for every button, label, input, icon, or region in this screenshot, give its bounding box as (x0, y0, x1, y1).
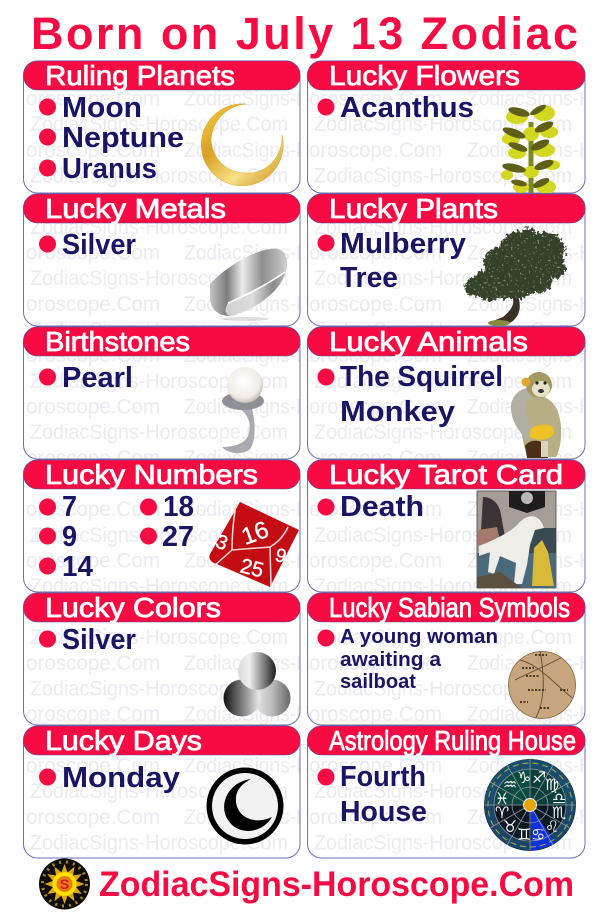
footer: logo: S (60, 876, 69, 892)
list: planets (39, 92, 184, 185)
icon: silver spheres (224, 652, 290, 716)
heading: lucky colors: Lucky Colors (45, 592, 221, 623)
icon: zodiac wheel: ♐ (532, 770, 546, 787)
background watermark: ZodiacSigns-Horoscope.Com (314, 780, 572, 803)
list: birthstones: Pearl (62, 362, 133, 394)
icon: red polyhedral die: 16 (238, 516, 272, 551)
list: sabian symbol: awaiting a (340, 649, 442, 671)
background watermark: ZodiacSigns-Horoscope.Com (314, 216, 572, 239)
panel: astrology ruling house (308, 725, 585, 858)
list: house (318, 761, 427, 828)
panel: lucky tarot card (308, 459, 585, 592)
list: tarot: Death (340, 491, 424, 523)
background watermark: ZodiacSigns-Horoscope.Com (30, 780, 288, 803)
background watermark: ZodiacSigns-H (467, 344, 593, 367)
icon: monday moon symbol (206, 768, 284, 844)
background watermark: ZodiacSigns-H (184, 652, 310, 675)
background watermark: oroscope.Com (309, 396, 442, 418)
panel: lucky numbers (24, 459, 300, 592)
background watermark: ZodiacSigns-H (467, 396, 593, 418)
background watermark: oroscope.Com (309, 550, 442, 572)
heading: lucky sabian symbols: Lucky Sabian Symbols (329, 592, 570, 623)
icon: zodiac wheel: ♑ (517, 770, 531, 787)
icon: acanthus flower (501, 103, 560, 194)
icon: zodiac wheel: ♎ (552, 791, 566, 808)
background watermark: ZodiacSigns-Horoscope.Com (314, 421, 572, 444)
list: animals: Monkey (340, 396, 455, 428)
background watermark: oroscope.Com (26, 447, 160, 470)
heading: birthstones: Birthstones (45, 326, 190, 357)
background watermark: oroscope.Com (309, 139, 442, 162)
panel: lucky metals (24, 193, 300, 326)
background watermark: oroscope.Com (26, 396, 160, 418)
icon: zodiac wheel (484, 759, 576, 851)
list: days: Monday (62, 762, 180, 794)
background watermark: oroscope.Com (26, 139, 160, 162)
heading: ruling planets: Ruling Planets (45, 60, 235, 91)
background watermark: ZodiacSigns-H (184, 754, 310, 778)
list: sabian symbol (318, 626, 498, 693)
background watermark: ZodiacSigns-Horoscope.Com (30, 216, 288, 239)
background watermark: ZodiacSigns-Horoscope.Com (30, 626, 288, 649)
background watermark: ZodiacSigns-Horoscope.Com (30, 318, 288, 342)
background watermark: ZodiacSigns-H (467, 242, 593, 264)
icon: zodiac wheel: ♋ (531, 827, 545, 844)
list: plants: Tree (340, 262, 398, 294)
icon: zodiac wheel: ♏ (552, 805, 566, 822)
background watermark: oroscope.Com (309, 652, 442, 675)
background watermark: ZodiacSigns-Horoscope.Com (30, 164, 288, 188)
list: sabian symbol: sailboat (340, 671, 416, 693)
panel: birthstones (24, 326, 300, 459)
background watermark: oroscope.Com (26, 703, 160, 726)
background watermark: oroscope.Com (309, 498, 442, 521)
title: Born on July 13 Zodiac (31, 8, 578, 59)
list: numbers: 27 (162, 521, 194, 553)
list: planets: Uranus (62, 153, 157, 185)
panel: lucky plants (308, 193, 585, 326)
background watermark: oroscope.Com (26, 242, 160, 264)
list: house: Fourth (340, 761, 426, 793)
list: animals (318, 361, 503, 428)
background watermark: ZodiacSigns-Horoscope.Com (314, 113, 572, 136)
background watermark: ZodiacSigns-Horoscope.Com (314, 575, 572, 598)
list: plants: Mulberry (340, 228, 466, 260)
background watermark: oroscope.Com (309, 344, 442, 367)
background watermark: ZodiacSigns-H (184, 88, 310, 110)
list: plants (318, 228, 466, 294)
icon: mulberry tree (465, 228, 566, 326)
icon: silver ring (210, 249, 287, 321)
background watermark: ZodiacSigns-H (467, 293, 593, 316)
background watermark: oroscope.Com (26, 88, 160, 110)
icon: red polyhedral die: 9 (273, 545, 288, 568)
icon: zodiac wheel: ♈ (495, 805, 509, 822)
background watermark: ZodiacSigns-Horoscope.Com (314, 832, 572, 854)
background watermark: ZodiacSigns-H (184, 498, 310, 521)
panel: lucky animals (308, 326, 585, 459)
icon: red polyhedral die: 25 (238, 555, 266, 582)
background watermark: ZodiacSigns-H (184, 139, 310, 162)
background watermark: ZodiacSigns-Horoscope.Com (314, 318, 572, 342)
panel: lucky days (24, 725, 300, 858)
background watermark: oroscope.Com (26, 293, 160, 316)
background watermark: oroscope.Com (309, 806, 442, 829)
background watermark: ZodiacSigns-H (467, 754, 593, 778)
panel: ruling planets (24, 60, 300, 193)
background watermark: ZodiacSigns-H (184, 242, 310, 264)
icon: zodiac wheel: ♍ (545, 777, 559, 794)
background watermark: ZodiacSigns-Horoscope.Com (314, 267, 572, 290)
background watermark: ZodiacSigns-Horoscope.Com (314, 678, 572, 700)
background watermark: oroscope.Com (309, 754, 442, 778)
icon: zodiac wheel: ♒ (503, 777, 517, 794)
background watermark: ZodiacSigns-Horoscope.Com (30, 113, 288, 136)
background watermark: oroscope.Com (309, 293, 442, 316)
background watermark: oroscope.Com (309, 703, 442, 726)
list: numbers (39, 491, 194, 583)
heading: lucky tarot card: Lucky Tarot Card (329, 459, 563, 490)
list: numbers: 9 (62, 521, 77, 553)
background watermark: ZodiacSigns-Horoscope.Com (30, 678, 288, 700)
list: house: House (340, 796, 427, 828)
background watermark (26, 88, 593, 854)
background watermark: ZodiacSigns-H (467, 550, 593, 572)
icon: zodiac wheel: ♊ (517, 827, 531, 844)
icon: gold crescent moon (201, 104, 283, 186)
heading: lucky animals: Lucky Animals (329, 326, 528, 357)
background watermark: oroscope.Com (26, 652, 160, 675)
footer: logo (39, 858, 90, 910)
background watermark: ZodiacSigns-Horoscope.Com (314, 164, 572, 188)
background watermark: ZodiacSigns-H (184, 293, 310, 316)
background watermark: oroscope.Com (309, 242, 442, 264)
background watermark: ZodiacSigns-Horoscope.Com (30, 370, 288, 393)
background watermark: ZodiacSigns-H (184, 447, 310, 470)
background watermark: oroscope.Com (26, 498, 160, 521)
list: colors: Silver (62, 624, 136, 656)
background watermark: ZodiacSigns-H (184, 396, 310, 418)
list: planets: Moon (62, 92, 142, 124)
footer: website name: ZodiacSigns-Horoscope.Com (99, 865, 574, 904)
panel: lucky colors (24, 592, 300, 725)
icon: zodiac wheel: ♉ (503, 819, 517, 836)
heading: lucky plants: Lucky Plants (329, 193, 498, 224)
icon: death tarot card (477, 491, 556, 588)
background watermark: oroscope.Com (26, 550, 160, 572)
background watermark: ZodiacSigns-H (184, 344, 310, 367)
background watermark: ZodiacSigns-H (184, 806, 310, 829)
background watermark: ZodiacSigns-H (184, 703, 310, 726)
background watermark: oroscope.Com (26, 806, 160, 829)
background watermark: ZodiacSigns-Horoscope.Com (314, 626, 572, 649)
background watermark: ZodiacSigns-Horoscope.Com (30, 832, 288, 854)
background watermark: oroscope.Com (309, 88, 442, 110)
background watermark: ZodiacSigns-Horoscope.Com (30, 421, 288, 444)
background watermark: oroscope.Com (26, 754, 160, 778)
background watermark: ZodiacSigns-H (467, 447, 593, 470)
list: sabian symbol: A young woman (340, 626, 498, 648)
list: numbers: 18 (163, 491, 194, 523)
icon: zodiac wheel: ♓ (495, 791, 509, 808)
icon: red polyhedral die (209, 502, 299, 587)
heading: lucky flowers: Lucky Flowers (329, 60, 520, 91)
background watermark: ZodiacSigns-H (467, 703, 593, 726)
background watermark: ZodiacSigns-H (467, 806, 593, 829)
background watermark: ZodiacSigns-H (467, 139, 593, 162)
background watermark: ZodiacSigns-H (467, 498, 593, 521)
background watermark: ZodiacSigns-Horoscope.Com (314, 370, 572, 393)
list: flowers: Acanthus (340, 92, 474, 124)
heading: lucky metals: Lucky Metals (45, 193, 226, 224)
background watermark: ZodiacSigns-H (467, 88, 593, 110)
background watermark: ZodiacSigns-Horoscope.Com (30, 524, 288, 547)
icon: zodiac wheel: ♌ (545, 819, 559, 836)
panel: lucky sabian symbols (308, 592, 585, 725)
list: planets: Neptune (62, 122, 184, 154)
heading: lucky numbers: Lucky Numbers (45, 459, 258, 490)
icon: red polyhedral die: 3 (213, 531, 231, 555)
background watermark: ZodiacSigns-H (467, 652, 593, 675)
background watermark: ZodiacSigns-Horoscope.Com (30, 267, 288, 290)
heading: lucky days: Lucky Days (45, 725, 202, 756)
list: metals: Silver (62, 229, 136, 261)
icon: pearl ring (222, 367, 264, 453)
list: numbers: 14 (62, 551, 93, 583)
list: animals: The Squirrel (340, 361, 503, 393)
background watermark: ZodiacSigns-Horoscope.Com (314, 524, 572, 547)
background watermark: oroscope.Com (309, 447, 442, 470)
panel: lucky flowers (308, 60, 585, 194)
list: numbers: 7 (62, 491, 77, 523)
background watermark: ZodiacSigns-H (184, 550, 310, 572)
icon: astrology chart disc (508, 650, 576, 720)
background watermark: ZodiacSigns-Horoscope.Com (30, 575, 288, 598)
icon: squirrel monkey (511, 372, 561, 458)
background watermark: oroscope.Com (26, 344, 160, 367)
